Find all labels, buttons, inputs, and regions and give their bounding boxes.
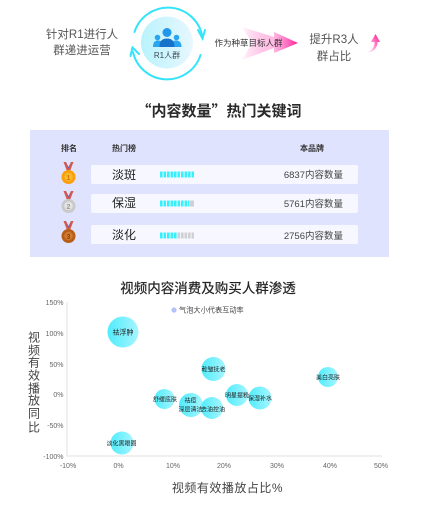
x tick labels: 10% — [166, 463, 180, 470]
y tick labels: 150% — [46, 300, 64, 307]
medal 3 — [62, 221, 76, 243]
icon: upward pink arrow — [367, 34, 380, 52]
progress bar — [160, 200, 190, 206]
legend: 气泡大小代表互动率 — [179, 306, 244, 314]
medal 3: 3 — [67, 234, 71, 241]
bubble labels: 美白亮肤 — [316, 374, 340, 382]
bubbles — [108, 316, 338, 454]
icon: R1 audience cycle — [130, 8, 205, 79]
x tick labels — [60, 463, 388, 470]
row 3: 淡化 — [112, 228, 136, 242]
y axis title: 视 — [28, 330, 40, 344]
row 1: 6837内容数量 — [284, 169, 343, 181]
x tick labels: 50% — [374, 463, 388, 470]
text: raise R3 share: 提升R3人 — [309, 32, 359, 46]
bubble chart — [28, 300, 388, 495]
people icon — [153, 28, 182, 47]
x tick labels: 20% — [217, 463, 231, 470]
row 1 — [62, 162, 358, 184]
arrow label: 作为种草目标人群 — [214, 38, 283, 48]
medal 2: 2 — [67, 204, 71, 211]
y axis title: 放 — [28, 392, 40, 408]
bubble labels: 乾皱抚老 — [201, 366, 226, 374]
column headers: 排名 — [61, 143, 77, 153]
heading: bubble chart title: 视频内容消费及购买人群渗透 — [120, 280, 296, 296]
progress bar — [160, 172, 194, 178]
y tick labels: 50% — [49, 362, 64, 369]
progress bar — [160, 232, 177, 238]
x tick labels: 0% — [113, 463, 124, 470]
y axis title: 播 — [28, 382, 40, 396]
y axis title: 效 — [28, 368, 40, 382]
ring arrows — [130, 8, 205, 79]
row 2 — [62, 191, 358, 213]
medal 1 — [62, 162, 76, 184]
text: raise R3 share: 群占比 — [317, 49, 351, 63]
y axis title — [28, 330, 40, 434]
bubble labels: 保湿补水 — [248, 394, 272, 402]
y tick labels — [43, 300, 64, 461]
text: targeted R1 operations: 针对R1进行人 — [46, 27, 119, 41]
row 1: 淡斑 — [112, 168, 136, 182]
row 3 — [62, 221, 358, 244]
x tick labels: -10% — [60, 463, 76, 470]
axes — [67, 302, 382, 456]
arrow: seeding target audience — [214, 27, 298, 60]
y tick labels: 0% — [53, 392, 64, 399]
panel: keyword table — [30, 130, 389, 257]
y tick labels: -50% — [47, 423, 64, 430]
y axis title: 频 — [28, 344, 40, 358]
column headers: 热门榜 — [112, 143, 136, 153]
bubble labels: 祛痘 — [184, 396, 197, 404]
bubble labels: 淡化黑眼圈 — [106, 440, 137, 448]
column headers: 本品牌 — [300, 143, 324, 153]
bubble labels: 明星提粉 — [225, 392, 249, 400]
row 2: 5761内容数量 — [284, 198, 343, 210]
circle label: R1人群 — [154, 50, 180, 60]
x axis title: 视频有效播放占比% — [172, 480, 283, 495]
row 2: 保湿 — [112, 195, 136, 210]
y axis title: 同 — [28, 406, 40, 420]
bubble labels — [106, 328, 340, 448]
y axis title: 比 — [28, 420, 40, 434]
text: targeted R1 operations: 群递进运营 — [53, 43, 111, 57]
column headers — [61, 143, 324, 153]
y axis title: 有 — [28, 356, 40, 370]
x tick labels: 30% — [270, 463, 284, 470]
medal 1: 1 — [67, 175, 71, 182]
medal 2 — [62, 191, 76, 213]
bubble labels: 祛浮肿 — [112, 328, 134, 336]
x tick labels: 40% — [323, 463, 337, 470]
row 3: 2756内容数量 — [284, 230, 343, 242]
bubble labels: 去油控油 — [201, 406, 225, 414]
y tick labels: -100% — [43, 454, 64, 461]
bubble labels: 舒缓底肤 — [153, 396, 177, 404]
bubble labels: 深层清洁 — [178, 406, 203, 414]
y tick labels: 100% — [46, 331, 64, 338]
circle background — [141, 16, 193, 68]
heading: content keywords: “内容数量”热门关键词 — [136, 100, 302, 121]
